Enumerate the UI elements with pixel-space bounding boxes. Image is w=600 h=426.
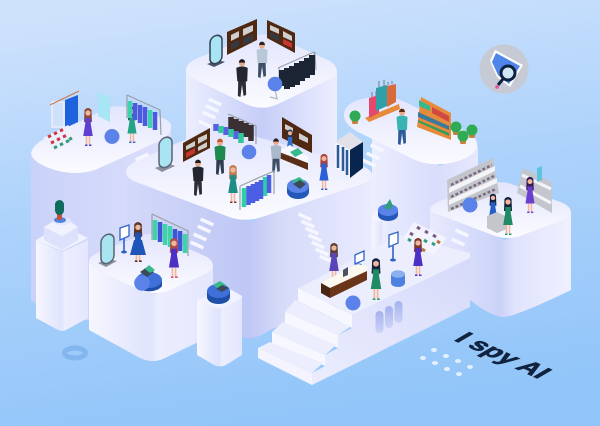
- rack: blue and green clothes: [216, 124, 241, 143]
- stairs: [298, 288, 352, 328]
- person: purple woman: [83, 108, 93, 146]
- shelf left: [183, 128, 210, 162]
- cash counter: [321, 264, 367, 298]
- person: grey shirt man: [256, 42, 268, 78]
- windows: [376, 311, 384, 333]
- marker: blue dot: [134, 275, 150, 291]
- panel: front platform with stairs: [258, 235, 470, 385]
- top platform items: [207, 19, 316, 99]
- shelf: right accessories: [517, 166, 552, 213]
- gray counter: [487, 212, 507, 233]
- lower left items: [98, 214, 230, 304]
- shoe table: [403, 222, 447, 255]
- upper right items: [350, 80, 478, 145]
- person: traveler: [396, 109, 408, 145]
- marker: blue dot: [242, 145, 256, 159]
- shelf: accessories: [447, 158, 499, 212]
- rack: dark clothes: [228, 114, 256, 144]
- icon: mirror: [155, 136, 175, 172]
- person: suit man: [192, 160, 204, 196]
- panel: left platform: [31, 106, 171, 320]
- person: cashier: [286, 130, 294, 158]
- blue cylinder: [391, 270, 405, 287]
- icon: glass panel: [98, 92, 110, 122]
- person: purple woman: [169, 238, 179, 278]
- rack: colored clothes: [152, 214, 188, 256]
- person: green dress woman: [503, 197, 513, 235]
- shoe display on column: [378, 199, 398, 221]
- person: blue dress woman: [130, 222, 146, 262]
- right platform items: [447, 158, 552, 235]
- stair bars on walls: [135, 98, 469, 263]
- round display: [136, 265, 162, 291]
- panel: middle platform: [126, 128, 372, 338]
- floor ring: [64, 348, 86, 358]
- panel: right platform: [430, 182, 571, 317]
- rack: black clothes: [278, 52, 316, 89]
- panel: upper right platform: [344, 96, 478, 290]
- changing booth: [335, 132, 363, 178]
- marker: blue dot: [462, 198, 478, 212]
- shelf right: [267, 20, 295, 53]
- person: suit man: [236, 59, 248, 97]
- plant: [350, 110, 360, 124]
- side wall: [312, 258, 470, 385]
- left platform items: [43, 91, 161, 152]
- pedestal: left pillar with plant: [36, 200, 88, 331]
- marker: blue dot with stem: [268, 77, 282, 99]
- marker: blue dot: [346, 296, 360, 310]
- icon: shoe table: [43, 125, 77, 152]
- person: green dress woman: [371, 258, 381, 300]
- person: blue dress woman: [319, 154, 329, 190]
- sign: [389, 232, 398, 262]
- counter: [279, 145, 308, 170]
- shelf left: [227, 19, 257, 55]
- person: teal dress woman: [228, 165, 238, 203]
- luggage group: [365, 80, 400, 122]
- platform top: [299, 235, 470, 315]
- pedestal: small lower: [197, 288, 242, 366]
- person: grey shirt man: [271, 138, 281, 173]
- panel: lower left platform: [89, 234, 213, 361]
- floor dots: [420, 348, 473, 376]
- plants: [450, 122, 462, 135]
- shelf back of counter: [282, 117, 312, 153]
- icon: blue magnifier badge: [480, 44, 528, 94]
- round display: [287, 177, 309, 199]
- person: green woman: [127, 107, 137, 143]
- icon: curtain window: [50, 91, 79, 128]
- person: purple shopper: [525, 177, 535, 213]
- icon: mirror: [207, 34, 225, 67]
- pedestal: shoe display column: [372, 211, 392, 268]
- rack: teal and blue clothes: [240, 171, 274, 210]
- rack: colored clothes: [127, 95, 161, 135]
- person: blue clerk: [489, 194, 497, 226]
- sign: [120, 225, 129, 254]
- icon: mirror: [98, 233, 117, 267]
- marker: blue dot: [104, 129, 120, 144]
- panel: top platform: [186, 34, 337, 190]
- title: I spy AI: [448, 329, 557, 382]
- person: cashier: [329, 243, 339, 281]
- middle platform items: [155, 114, 363, 210]
- small screen sign: [355, 251, 364, 266]
- round display on pedestal: [207, 281, 230, 304]
- orange shelf: [417, 97, 451, 140]
- front platform items: [321, 222, 447, 310]
- person: purple shopper: [413, 238, 423, 276]
- person: green sweater man: [214, 139, 226, 175]
